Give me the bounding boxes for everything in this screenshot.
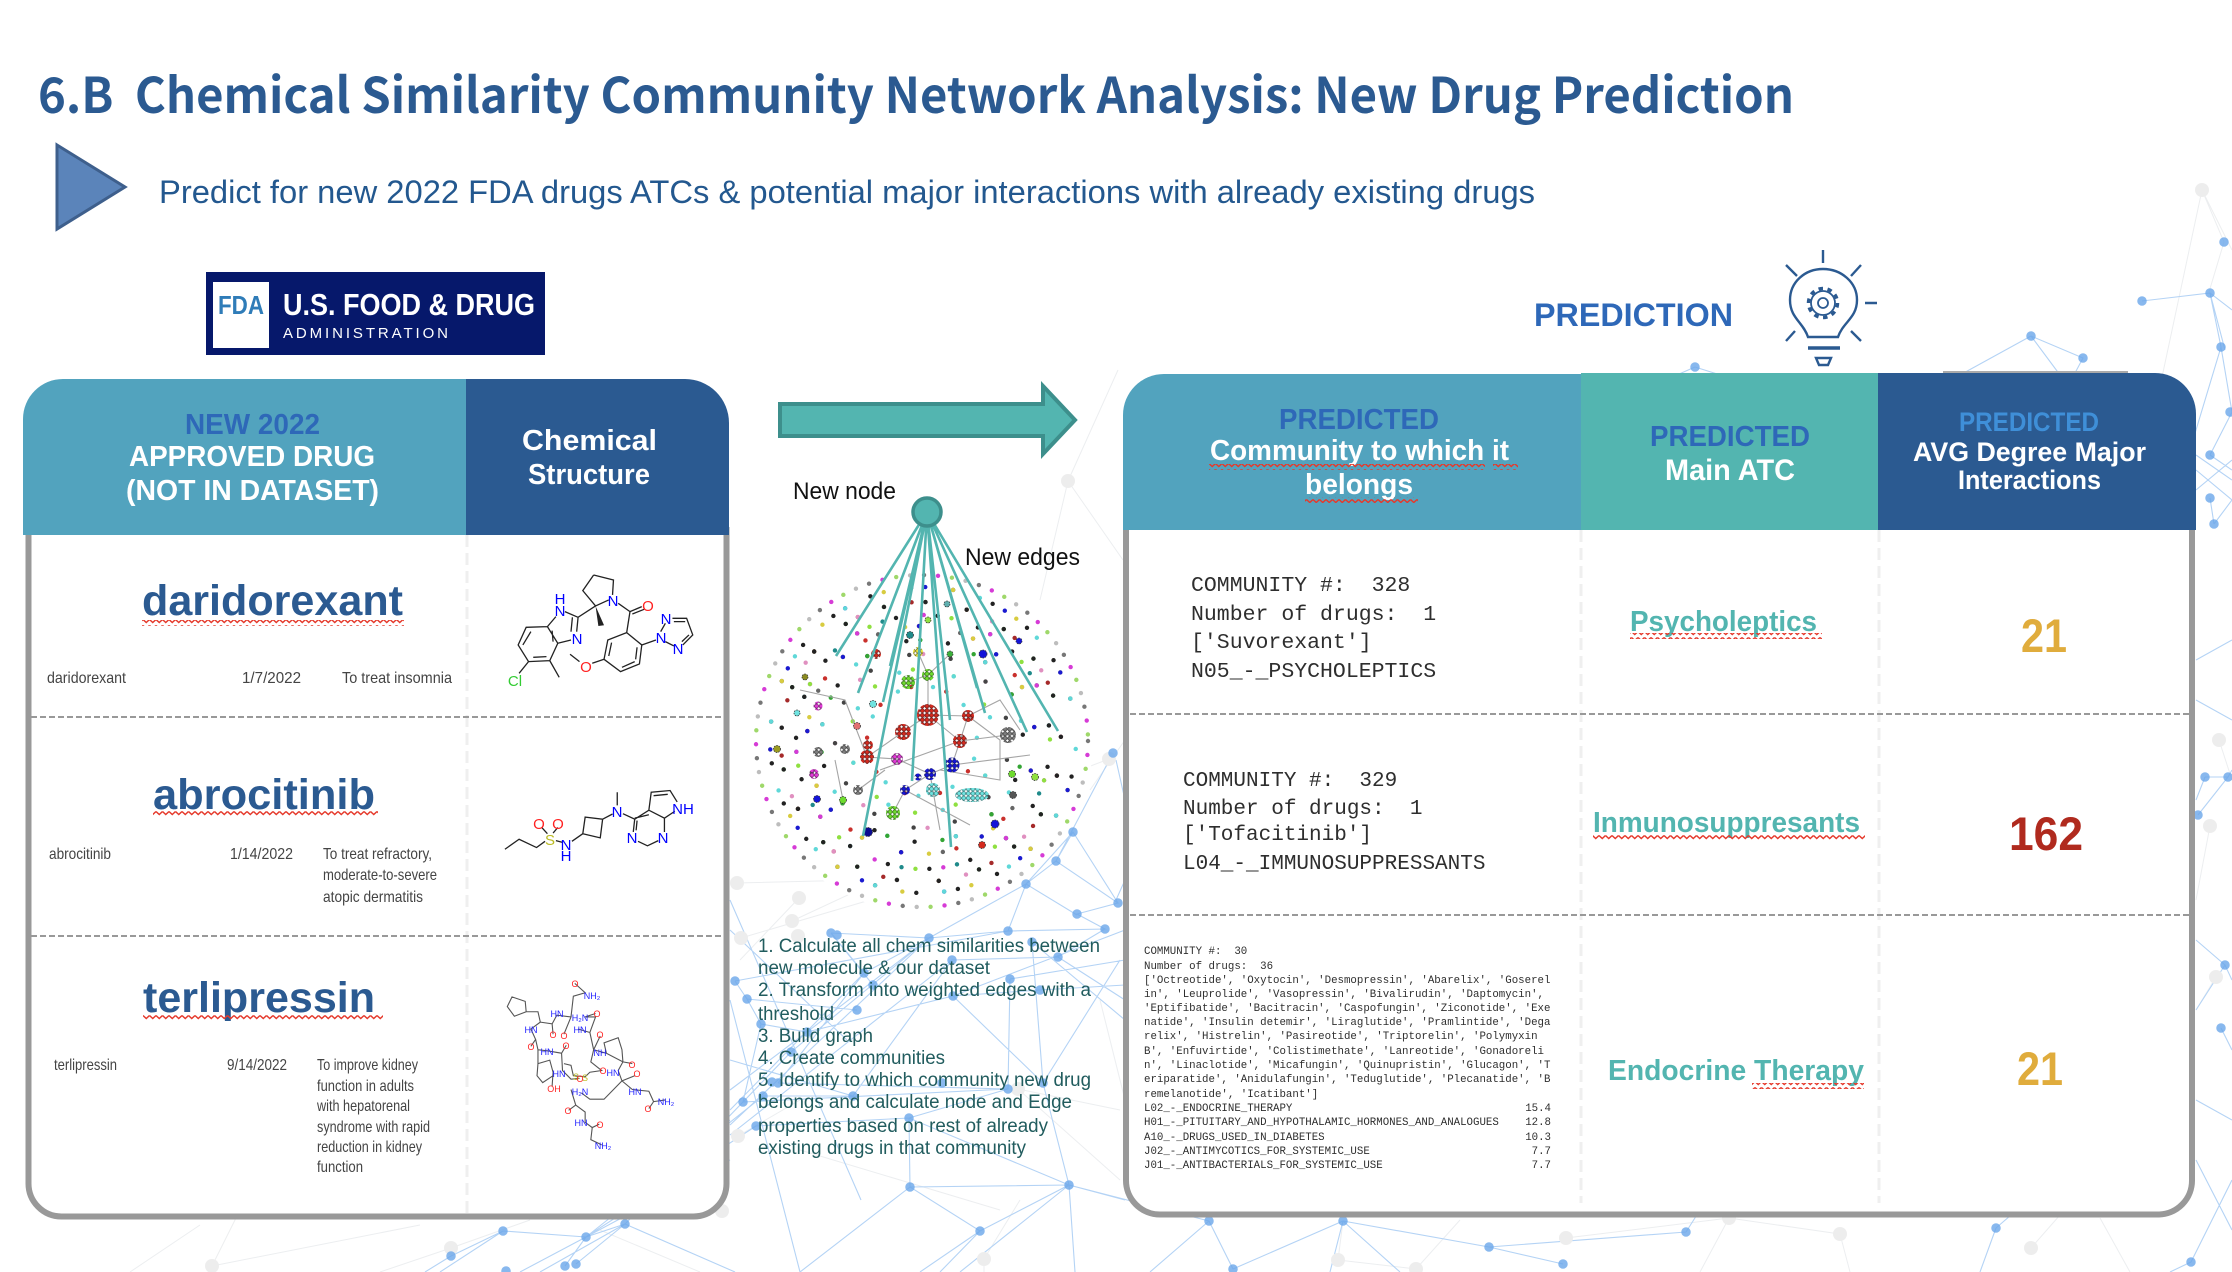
- chemical structure: terlipressin: NH: [594, 1048, 606, 1058]
- chemical structure: terlipressin: O: [576, 1074, 584, 1084]
- new edges: [836, 512, 1058, 847]
- arrow: to prediction: [780, 386, 1075, 454]
- panel: new approved drugs table: [23, 379, 729, 1216]
- chemical structure: abrocitinib: H: [561, 848, 571, 865]
- steps text: [758, 936, 1100, 1159]
- steps text: 2. Transform into weighted edges with a: [758, 980, 1091, 1001]
- chemical structure: abrocitinib: O: [533, 816, 545, 833]
- chemical structure: daridorexant: N: [555, 603, 565, 620]
- chemical structure: abrocitinib: N: [627, 830, 637, 847]
- row: community 30: 15.4: [1525, 1103, 1551, 1115]
- row: terlipressin: function: [317, 1159, 363, 1176]
- steps text: properties based on rest of already: [758, 1116, 1048, 1137]
- header: chemical structure: [466, 379, 729, 535]
- row: community 329: L04_-_IMMUNOSUPPRESSANTS: [1183, 853, 1485, 876]
- chemical structure: daridorexant: H: [555, 591, 565, 608]
- label: new edges: New edges: [965, 544, 1080, 571]
- header: predicted community: belongs: [1305, 469, 1413, 501]
- row: community 30: remelanotide', 'Icatibant']: [1144, 1089, 1318, 1101]
- chemical structure: terlipressin: NH₂: [595, 1141, 612, 1151]
- steps text: new molecule & our dataset: [758, 958, 991, 979]
- steps text: 5. Identify to which community new drug: [758, 1070, 1091, 1091]
- chemical structure: terlipressin: NH₂: [658, 1097, 675, 1107]
- row: community 329: ['Tofacitinib']: [1183, 824, 1372, 847]
- ATC: endocrine therapy: Endocrine Therapy: [1608, 1055, 1864, 1087]
- chemical structure: terlipressin: O: [593, 1009, 601, 1019]
- chemical structure: terlipressin: O: [527, 1042, 535, 1052]
- chemical structure: terlipressin: [507, 979, 675, 1151]
- row: community 30: [1144, 946, 1551, 1172]
- row: community 30: in', 'Leuprolide', 'Vasopressin', 'Bivalirudin', 'Daptomycin',: [1144, 989, 1544, 1001]
- chemical structure: daridorexant: N: [656, 630, 666, 647]
- steps text: 1. Calculate all chem similarities between: [758, 936, 1100, 957]
- table body: [1126, 526, 2192, 1214]
- row: abrocitinib: moderate-to-severe: [323, 867, 437, 884]
- chemical structure: daridorexant: Cl: [508, 673, 522, 690]
- header: predicted main ATC: [1581, 373, 1878, 530]
- row: community 30: 12.8: [1525, 1117, 1551, 1129]
- steps text: 3. Build graph: [758, 1026, 873, 1047]
- value: 21: 21: [2017, 1042, 2063, 1095]
- row: community 328: [1191, 574, 1436, 684]
- chemical structure: terlipressin: HN: [552, 1069, 566, 1079]
- steps text: 4. Create communities: [758, 1048, 945, 1069]
- steps text: belongs and calculate node and Edge: [758, 1092, 1072, 1113]
- header: predicted AVG degree: Interactions: [1958, 465, 2101, 495]
- row: abrocitinib: abrocitinib: [49, 846, 111, 863]
- chemical structure: terlipressin: HN: [628, 1087, 642, 1097]
- header: predicted community: [1123, 374, 1581, 530]
- row: abrocitinib: [49, 771, 437, 906]
- row: daridorexant: 1/7/2022: [242, 670, 301, 687]
- row: community 30: ['Octreotide', 'Oxytocin', 'Desmopressin', 'Abarelix', 'Goserel: [1144, 975, 1550, 987]
- row: community 30: 7.7: [1532, 1146, 1551, 1158]
- header: predicted community: Community to which it: [1210, 435, 1509, 467]
- chemical structure: daridorexant: N: [673, 641, 683, 658]
- chemical structure: abrocitinib: N: [612, 804, 622, 821]
- value: 162: 162: [2009, 807, 2083, 860]
- row: community 30: 'Eptifibatide', 'Bacitracin', 'Caspofungin', 'Ziconotide', 'Exe: [1144, 1003, 1550, 1015]
- panel: prediction table: [1123, 372, 2196, 1214]
- steps text: threshold: [758, 1004, 834, 1025]
- community network: [751, 570, 1093, 912]
- header: chemical structure: Structure: [528, 459, 650, 491]
- header: predicted AVG degree: [1878, 373, 2196, 530]
- header: predicted AVG degree: AVG Degree Major: [1913, 437, 2146, 467]
- row: terlipressin: syndrome with rapid: [317, 1119, 430, 1136]
- row: terlipressin: with hepatorenal: [316, 1098, 410, 1115]
- chemical structure: terlipressin: O: [596, 1030, 604, 1040]
- row: community 30: Number of drugs: 36: [1144, 961, 1273, 973]
- chemical structure: daridorexant: N: [608, 593, 618, 610]
- subtitle: Predict for new 2022 FDA drugs ATCs & potential major interactions with already existing drugs: [159, 174, 1535, 210]
- row: community 328: COMMUNITY #: 328: [1191, 574, 1410, 598]
- row: community 329: COMMUNITY #: 329: [1183, 770, 1397, 793]
- row: community 30: A10_-_DRUGS_USED_IN_DIABETES: [1144, 1132, 1325, 1144]
- chemical structure: terlipressin: O: [633, 1069, 641, 1079]
- row: terlipressin: [54, 974, 430, 1176]
- row: daridorexant: To treat insomnia: [342, 670, 452, 687]
- chemical structure: terlipressin: O: [644, 1104, 652, 1114]
- row: community 328: Number of drugs: 1: [1191, 603, 1436, 627]
- chemical structure: terlipressin: HN: [550, 1009, 564, 1019]
- row: abrocitinib: atopic dermatitis: [323, 889, 423, 906]
- chemical structure: terlipressin: HN: [574, 1025, 586, 1035]
- row: community 329: [1183, 770, 1485, 876]
- chemical structure: daridorexant: N: [661, 611, 671, 628]
- chemical structure: abrocitinib: N: [658, 830, 668, 847]
- icon: bullet triangle: [57, 145, 125, 229]
- chemical structure: terlipressin: HN: [540, 1047, 554, 1057]
- chemical structure: terlipressin: OH: [547, 1084, 561, 1094]
- header: new 2022 approved drug: NEW 2022: [185, 409, 320, 441]
- row: terlipressin: reduction in kidney: [317, 1139, 422, 1156]
- row: community 30: COMMUNITY #: 30: [1144, 946, 1247, 958]
- row: community 30: J01_-_ANTIBACTERIALS_FOR_SYSTEMIC_USE: [1144, 1160, 1383, 1172]
- row: abrocitinib: abrocitinib: [153, 771, 375, 819]
- row: community 30: J02_-_ANTIMYCOTICS_FOR_SYSTEMIC_USE: [1144, 1146, 1370, 1158]
- chemical structure: terlipressin: O: [562, 1041, 570, 1051]
- row: community 329: Number of drugs: 1: [1183, 798, 1422, 821]
- row: terlipressin: function in adults: [317, 1078, 414, 1095]
- network diagram: [751, 478, 1093, 912]
- header: new 2022 approved drug: APPROVED DRUG: [129, 441, 375, 473]
- chemical structure: terlipressin: O: [549, 1030, 557, 1040]
- heading: prediction: PREDICTION: [1534, 297, 1733, 333]
- chemical structure: abrocitinib: S: [545, 832, 555, 849]
- row: community 30: eriparatide', 'Anidulafungin', 'Teduglutide', 'Plecanatide', 'B: [1144, 1074, 1551, 1086]
- header: predicted main ATC: Main ATC: [1665, 454, 1795, 487]
- chemical structure: abrocitinib: [505, 790, 694, 865]
- row: community 30: n', 'Linaclotide', 'Micafungin', 'Quinupristin', 'Glucagon', 'T: [1144, 1060, 1551, 1072]
- ATC: psycholeptics: Psycholeptics: [1630, 606, 1817, 638]
- FDA logo: U.S. FOOD & DRUG: [283, 287, 535, 322]
- row: community 30: relix', 'Histrelin', 'Pasireotide', 'Triptorelin', 'Polymyxin: [1144, 1031, 1538, 1043]
- chemical structure: terlipressin: O: [560, 1031, 568, 1041]
- chemical structure: terlipressin: S: [582, 1073, 588, 1083]
- header: predicted main ATC: PREDICTED: [1650, 421, 1810, 453]
- chemical structure: terlipressin: HN: [574, 1118, 588, 1128]
- chemical structure: terlipressin: S: [573, 1072, 579, 1082]
- row: community 30: natide', 'Insulin detemir', 'Liraglutide', 'Pramlintide', 'Dega: [1144, 1017, 1551, 1029]
- row: community 328: N05_-_PSYCHOLEPTICS: [1191, 660, 1436, 684]
- chemical structure: abrocitinib: O: [552, 816, 564, 833]
- row: daridorexant: daridorexant: [47, 670, 126, 687]
- ATC: inmunosuppresants: Inmunosuppresants: [1593, 807, 1860, 839]
- chemical structure: abrocitinib: NH: [672, 801, 694, 818]
- chemical structure: abrocitinib: N: [561, 837, 571, 854]
- chemical structure: daridorexant: N: [572, 631, 582, 648]
- table body: [28, 530, 727, 1216]
- row: daridorexant: [47, 577, 452, 687]
- FDA logo: ADMINISTRATION: [283, 325, 448, 342]
- header: predicted AVG degree: PREDICTED: [1959, 407, 2099, 437]
- new node: [913, 498, 941, 526]
- icon: light bulb with gear: [1786, 250, 1877, 365]
- title: 6.B Chemical Similarity Community Network Analysis: New Drug Prediction: [38, 57, 1794, 128]
- chemical structure: terlipressin: HN: [524, 1025, 538, 1035]
- row: community 30: 7.7: [1532, 1160, 1551, 1172]
- row: community 328: ['Suvorexant']: [1191, 631, 1372, 655]
- header: predicted community: PREDICTED: [1279, 404, 1439, 436]
- row: terlipressin: To improve kidney: [317, 1057, 418, 1074]
- chemical structure: terlipressin: NH₂: [584, 991, 601, 1001]
- chemical structure: daridorexant: O: [642, 598, 654, 615]
- label: new node: New node: [793, 478, 896, 505]
- chemical structure: daridorexant: O: [580, 659, 592, 676]
- row: community 30: B', 'Enfuvirtide', 'Colistimethate', 'Lanreotide', 'Gonadoreli: [1144, 1046, 1544, 1058]
- chemical structure: terlipressin: O: [628, 1060, 636, 1070]
- FDA logo: [206, 272, 545, 355]
- chemical structure: terlipressin: H₂N: [572, 1013, 588, 1023]
- FDA logo: FDA: [218, 290, 264, 320]
- row: terlipressin: 9/14/2022: [227, 1057, 287, 1074]
- header: new 2022 approved drug: [23, 379, 466, 535]
- chemical structure: terlipressin: HN: [606, 1068, 620, 1078]
- chemical structure: terlipressin: O: [596, 1120, 604, 1130]
- chemical structure: terlipressin: O: [571, 979, 579, 989]
- chemical structure: terlipressin: O: [564, 1106, 572, 1116]
- chemical structure: terlipressin: H₂N: [572, 1087, 588, 1097]
- header: chemical structure: Chemical: [522, 425, 657, 457]
- row: abrocitinib: To treat refractory,: [323, 846, 432, 863]
- row: terlipressin: terlipressin: [143, 974, 375, 1022]
- chemical structure: terlipressin: O: [599, 1066, 607, 1076]
- header: new 2022 approved drug: (NOT IN DATASET): [126, 475, 379, 507]
- steps text: existing drugs in that community: [758, 1138, 1026, 1159]
- row: community 30: H01_-_PITUITARY_AND_HYPOTHALAMIC_HORMONES_AND_ANALOGUES: [1144, 1117, 1499, 1129]
- row: community 30: 10.3: [1525, 1132, 1551, 1144]
- row: daridorexant: daridorexant: [142, 577, 403, 625]
- chemical structure: daridorexant: [508, 575, 693, 690]
- value: 21: 21: [2021, 609, 2067, 662]
- row: community 30: L02_-_ENDOCRINE_THERAPY: [1144, 1103, 1293, 1115]
- row: abrocitinib: 1/14/2022: [230, 846, 293, 863]
- row: terlipressin: terlipressin: [54, 1057, 117, 1074]
